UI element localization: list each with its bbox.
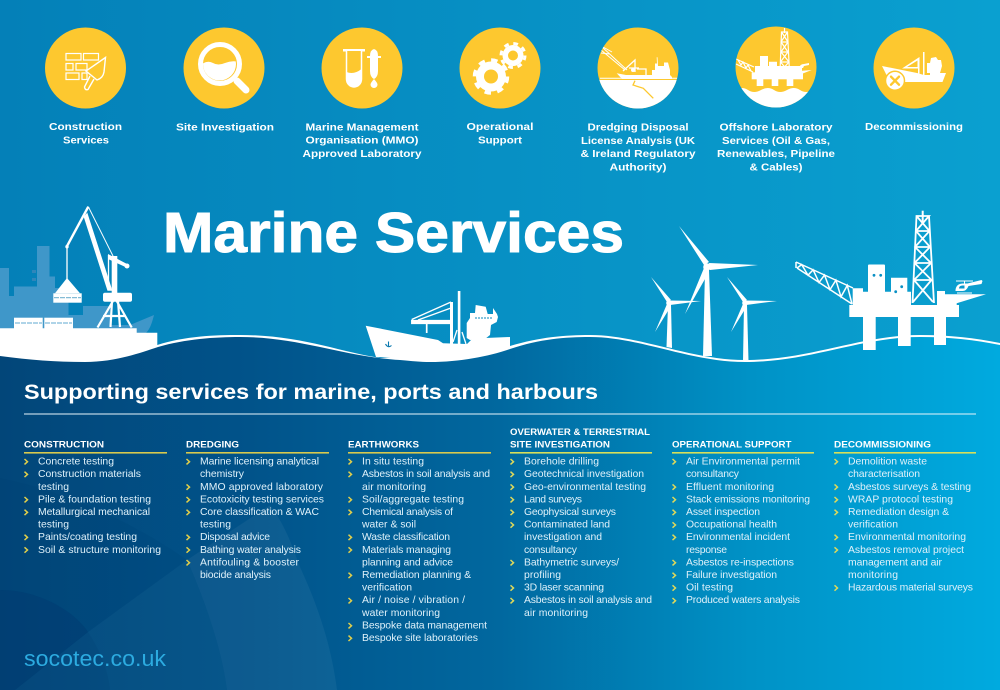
list: dredging services xyxy=(186,456,324,581)
list: operational support services: Occupational health xyxy=(686,520,777,531)
icon: marine management organisation laboratory xyxy=(322,28,402,108)
list: decommissioning services: WRAP protocol testing xyxy=(848,494,953,505)
column: construction: CONSTRUCTION xyxy=(24,440,104,450)
list: decommissioning services: characterisation xyxy=(848,469,920,480)
list: construction services: testing xyxy=(38,520,69,531)
label: offshore laboratory services: Services (Oil & Gas, xyxy=(722,135,830,147)
illustration: harbour crane xyxy=(53,207,132,328)
list: earthworks services: planning and advice xyxy=(362,557,453,568)
lower panel background xyxy=(0,337,1000,690)
icon: construction services xyxy=(45,28,126,108)
list: site investigation services: Contaminated land xyxy=(524,520,610,531)
list: site investigation services: Land surveys xyxy=(524,494,582,505)
label: construction services: Construction xyxy=(49,121,122,133)
list: site investigation services xyxy=(510,456,652,619)
list: decommissioning services: Remediation design & xyxy=(848,507,949,518)
list: earthworks services: water & soil xyxy=(361,520,416,531)
column: earthworks: EARTHWORKS xyxy=(348,440,419,450)
list: construction services: Pile & foundation testing xyxy=(38,494,151,505)
list: dredging services: Disposal advice xyxy=(200,532,270,543)
list: site investigation services: Geophysical surveys xyxy=(524,507,616,518)
list: decommissioning services: monitoring xyxy=(848,570,898,581)
list: site investigation services: profiling xyxy=(524,570,561,581)
illustration: wave band xyxy=(0,328,1000,400)
list: dredging services: Bathing water analysis xyxy=(200,545,301,556)
list: dredging services: Marine licensing analytical xyxy=(200,456,319,468)
label: decommissioning: Decommissioning xyxy=(865,121,963,133)
label: dredging disposal: Dredging Disposal xyxy=(588,121,689,133)
list: operational support services: Produced waters analysis xyxy=(686,595,800,606)
list: operational support services: Environmental incident xyxy=(686,532,790,543)
icon: decommissioning xyxy=(874,28,954,108)
list: construction services: testing xyxy=(38,482,69,493)
column: overwater and terrestrial site investigation: SITE INVESTIGATION xyxy=(510,440,610,450)
list: construction services xyxy=(24,456,161,556)
list: construction services: Paints/coating testing xyxy=(38,532,137,543)
list: construction services: Metallurgical mechanical xyxy=(38,507,150,518)
decorative lower panel shapes xyxy=(0,478,337,690)
label: site investigation: Site Investigation xyxy=(176,121,274,133)
label: operational support: Support xyxy=(478,134,523,146)
list: decommissioning services: Hazardous material surveys xyxy=(848,583,973,594)
list: decommissioning services: Asbestos surveys & testing xyxy=(848,482,971,493)
heading: supporting services: Supporting services for marine, ports and harbours xyxy=(24,380,598,404)
label: offshore laboratory services: & Cables) xyxy=(750,161,802,173)
column: operational support xyxy=(672,440,814,606)
list: decommissioning services: verification xyxy=(848,520,898,531)
list: dredging services: Ecotoxicity testing services xyxy=(200,494,324,505)
illustration: wind turbines xyxy=(651,226,777,361)
list: dredging services: testing xyxy=(200,520,231,531)
column: earthworks xyxy=(348,440,491,644)
icon: site investigation xyxy=(184,28,264,108)
list: site investigation services: investigation and xyxy=(524,532,602,543)
list: earthworks services: air monitoring xyxy=(362,482,426,493)
list: decommissioning services: Asbestos removal project xyxy=(848,545,964,556)
list: dredging services: chemistry xyxy=(200,469,245,480)
list: earthworks services xyxy=(348,456,490,644)
list: decommissioning services: Demolition waste xyxy=(848,456,927,468)
column: construction xyxy=(24,440,167,556)
list: decommissioning services: management and air xyxy=(848,557,943,568)
list: earthworks services: verification xyxy=(362,583,412,594)
title: Marine Services xyxy=(163,201,624,265)
icon: dredging disposal xyxy=(598,28,678,108)
label: offshore laboratory services xyxy=(717,121,835,173)
column: operational support: OPERATIONAL SUPPORT xyxy=(672,440,792,450)
list: construction services: Soil & structure monitoring xyxy=(38,545,161,556)
list: earthworks services: Bespoke site laboratories xyxy=(362,633,478,644)
website address: socotec.co.uk xyxy=(24,646,167,671)
column: overwater and terrestrial site investigation: OVERWATER & TERRESTRIAL xyxy=(510,427,650,438)
label: marine management organisation xyxy=(302,121,422,160)
list: construction services: Concrete testing xyxy=(38,456,114,468)
list: site investigation services: Borehole drilling xyxy=(524,456,599,468)
list: site investigation services: Geo-environmental testing xyxy=(524,482,646,493)
list: dredging services: Antifouling & booster xyxy=(200,557,300,568)
label: operational support xyxy=(466,121,534,146)
illustration: containers xyxy=(14,318,73,329)
label: offshore laboratory services: Renewables, Pipeline xyxy=(717,148,835,160)
list: site investigation services: Geotechnical investigation xyxy=(524,469,644,480)
list: earthworks services: Soil/aggregate testing xyxy=(362,494,464,505)
label: dredging disposal: License Analysis (UK xyxy=(581,135,695,147)
list: operational support services: Asbestos re-inspections xyxy=(686,557,794,568)
list: earthworks services: In situ testing xyxy=(362,456,424,468)
list: earthworks services: Materials managing xyxy=(362,545,451,556)
list: construction services: Construction materials xyxy=(38,469,141,480)
list: decommissioning services: Environmental monitoring xyxy=(848,532,966,543)
list: earthworks services: Air / noise / vibration / xyxy=(362,595,465,606)
list: earthworks services: Chemical analysis of xyxy=(362,507,453,518)
list: operational support services: Oil testing xyxy=(686,583,733,594)
column: decommissioning xyxy=(834,440,976,594)
list: operational support services xyxy=(672,456,810,606)
icon: offshore laboratory xyxy=(735,26,816,110)
list: earthworks services: water monitoring xyxy=(361,608,440,619)
list: site investigation services: 3D laser scanning xyxy=(524,583,604,594)
list: earthworks services: Remediation planning & xyxy=(362,570,471,581)
label: marine management organisation: Approved Laboratory xyxy=(302,148,422,160)
list: site investigation services: Bathymetric surveys/ xyxy=(524,557,619,568)
label: dredging disposal: Authority) xyxy=(610,161,666,173)
column: decommissioning: DECOMMISSIONING xyxy=(834,440,931,450)
list: dredging services: biocide analysis xyxy=(200,570,271,581)
label: dredging disposal: & Ireland Regulatory xyxy=(580,148,696,160)
label: marine management organisation: Organisation (MMO) xyxy=(306,135,418,147)
list: operational support services: Effluent monitoring xyxy=(686,482,774,493)
label: dredging disposal xyxy=(580,121,696,173)
list: site investigation services: air monitoring xyxy=(524,608,588,619)
list: site investigation services: consultancy xyxy=(524,545,578,556)
column: dredging: DREDGING xyxy=(186,440,239,450)
list: decommissioning services xyxy=(834,456,973,594)
label: marine management organisation: Marine Management xyxy=(306,121,419,133)
list: dredging services: MMO approved laboratory xyxy=(200,482,324,493)
list: operational support services: Asset inspection xyxy=(686,507,760,518)
label: construction services: Services xyxy=(63,134,109,146)
list: earthworks services: Asbestos in soil analysis and xyxy=(362,469,490,480)
label: offshore laboratory services: Offshore Laboratory xyxy=(720,121,833,133)
column: dredging xyxy=(186,440,329,581)
icon: operational support gears xyxy=(460,28,540,108)
illustration: offshore platform xyxy=(796,211,986,350)
list: operational support services: response xyxy=(686,545,727,556)
list: operational support services: Stack emissions monitoring xyxy=(686,494,810,505)
list: site investigation services: Asbestos in soil analysis and xyxy=(524,595,652,606)
list: operational support services: Air Environmental permit xyxy=(686,456,800,468)
list: operational support services: consultancy xyxy=(686,469,740,480)
list: earthworks services: Waste classification xyxy=(362,532,450,543)
list: operational support services: Failure investigation xyxy=(686,570,777,581)
column: overwater and terrestrial site investigation xyxy=(510,427,652,619)
illustration: cargo ship xyxy=(366,291,510,358)
label: operational support: Operational xyxy=(466,121,534,133)
list: earthworks services: Bespoke data management xyxy=(362,620,487,631)
illustration: port skyline xyxy=(0,246,154,333)
list: dredging services: Core classification & WAC xyxy=(200,507,319,518)
label: construction services xyxy=(49,121,122,146)
